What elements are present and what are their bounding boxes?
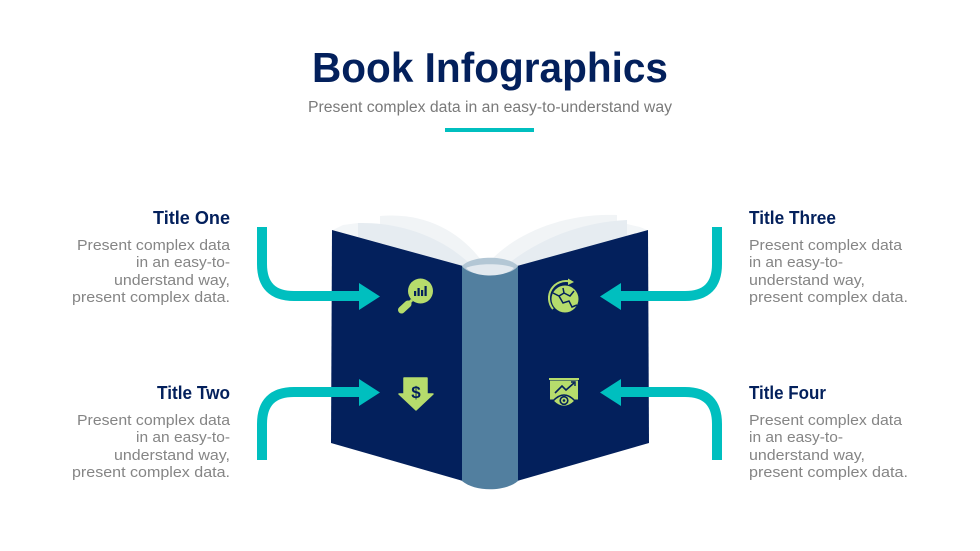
text block: title three: Title Three [749,208,836,228]
text block: title three: present complex data. [749,289,908,306]
text block: title two: Present complex data [77,412,231,429]
text block: title one [72,208,231,306]
text block: title two: understand way, [114,447,230,464]
title: Book Infographics [312,44,668,91]
spine top opening [462,258,518,276]
text block: title two: present complex data. [72,464,230,481]
text block: title one: Title One [153,208,230,228]
text block: title three: in an easy-to- [749,254,843,271]
text block: title four: understand way, [749,447,865,464]
icon: globe [549,278,578,312]
text block: title one: present complex data. [72,289,230,306]
title underline [445,128,534,132]
text block: title two: in an easy-to- [136,429,230,446]
text block: title one: Present complex data [77,237,231,254]
text block: title one: understand way, [114,272,230,289]
book illustration [331,215,649,489]
text block: title three [749,208,908,306]
arrow: title three [600,227,717,310]
icon: dollar down arrow: $ [411,383,421,402]
text block: title one: in an easy-to- [136,254,230,271]
text block: title four: Present complex data [749,412,903,429]
text block: title two [72,383,231,481]
subtitle: Present complex data in an easy-to-understand way [308,99,672,116]
text block: title three: Present complex data [749,237,903,254]
text block: title two: Title Two [157,383,230,403]
arrow: title two [262,379,380,460]
text block: title four: Title Four [749,383,826,403]
text block: title four: present complex data. [749,464,908,481]
right cover [517,230,649,481]
arrow: title one [262,227,380,310]
text block: title three: understand way, [749,272,865,289]
arrow: title four [600,379,717,460]
spine [462,266,518,489]
icon: vision chart with eye [549,378,579,406]
book pages [333,215,647,266]
left cover [331,230,463,481]
text block: title four [749,383,908,481]
text block: title four: in an easy-to- [749,429,843,446]
icon: dollar down arrow [399,378,433,410]
icon: magnifier with chart [402,278,433,310]
